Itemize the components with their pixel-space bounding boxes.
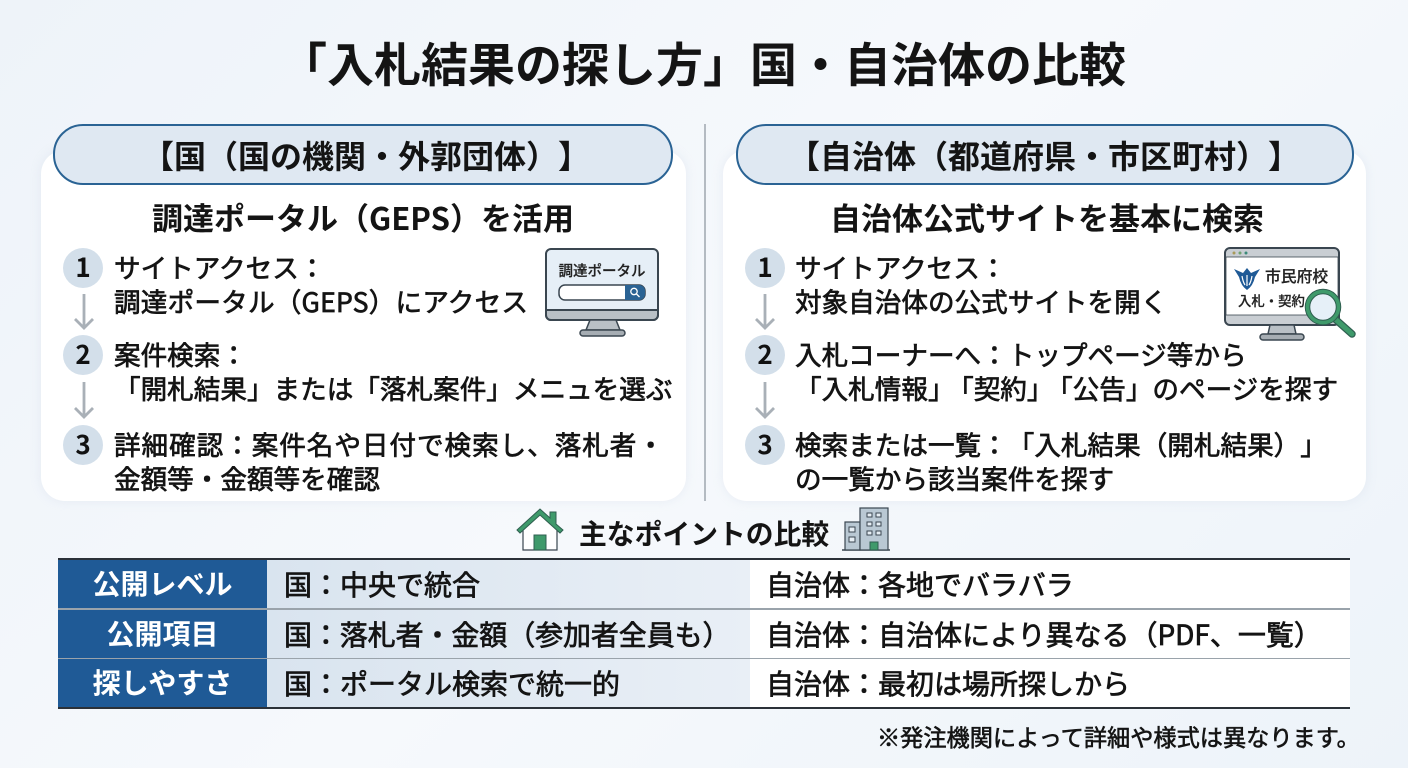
table top border [58, 558, 1350, 560]
step 1 number: 1 [75, 248, 91, 285]
step 2 number: 2 [757, 335, 773, 372]
step 3 text: の一覧から該当案件を探す [795, 458, 1114, 497]
icon: city website monitor with magnifier: 入札・契約 [1238, 290, 1305, 310]
arrow 1 to 2 [755, 294, 775, 330]
step 1 text: サイトアクセス： [114, 247, 325, 286]
title: 「入札結果の探し方」国・自治体の比較 [280, 27, 1126, 96]
row: ease of finding [58, 659, 1350, 707]
icon: house [516, 508, 564, 551]
icon: procurement portal monitor [545, 248, 659, 337]
arrow 2 to 3 [74, 382, 94, 419]
step 2 number [745, 335, 785, 375]
panel background [41, 150, 686, 501]
step 1 number [745, 248, 785, 288]
icon: procurement portal monitor: 調達ポータル [558, 260, 646, 281]
arrow 2 to 3 [755, 382, 775, 419]
comparison heading [516, 507, 890, 553]
panel heading: 【国（国の機関・外郭団体）】 [142, 132, 590, 178]
row: disclosure level [58, 560, 1350, 608]
row: ease of finding: 国：ポータル検索で統一的 [284, 663, 620, 703]
step 2 text [795, 334, 1338, 407]
icon: city website monitor with magnifier: 市民府校 [1265, 264, 1328, 287]
step 1 text: サイトアクセス： [795, 247, 1006, 286]
step 3 text: 検索または一覧：「入札結果（開札結果）」 [795, 424, 1327, 463]
step 2 number: 2 [75, 335, 91, 372]
table bottom border [58, 707, 1350, 709]
panel header pill [53, 124, 673, 185]
step 1 text [114, 247, 528, 320]
step 1 text: 対象自治体の公式サイトを開く [795, 281, 1167, 320]
step 3 number: 3 [757, 425, 773, 462]
panel background [723, 150, 1366, 501]
step 2 text: 案件検索： [114, 334, 247, 373]
row: disclosure level: 国：中央で統合 [284, 564, 480, 604]
panel header pill [736, 124, 1354, 185]
arrow 1 to 2 [74, 294, 94, 330]
step 2 number [63, 335, 103, 375]
panel: national [41, 124, 686, 501]
step 3 number: 3 [75, 425, 91, 462]
step 2 text: 入札コーナーへ：トップページ等から [795, 334, 1247, 373]
step 3 text: 金額等・金額等を確認 [114, 458, 380, 497]
step 3 text [114, 424, 665, 497]
step 1 number [63, 248, 103, 288]
central divider [704, 124, 706, 501]
emblem [1234, 268, 1260, 290]
row: ease of finding: 探しやすさ [93, 662, 232, 702]
step 2 text: 「開札結果」または「落札案件」メニュを選ぶ [114, 368, 672, 407]
table row divider [58, 608, 1350, 610]
row: disclosed items: 国：落札者・金額（参加者全員も） [284, 614, 730, 654]
footnote: ※発注機関によって詳細や様式は異なります。 [877, 719, 1360, 753]
icon: city website monitor with magnifier [1224, 247, 1356, 341]
table row divider [58, 658, 1350, 659]
step 2 text [114, 334, 672, 407]
icon: office buildings [842, 507, 890, 551]
row: ease of finding: 自治体：最初は場所探しから [766, 663, 1130, 703]
panel subheading: 自治体公式サイトを基本に検索 [830, 194, 1264, 239]
panel subheading: 調達ポータル（GEPS）を活用 [152, 194, 574, 239]
row: disclosure level: 公開レベル [92, 563, 232, 603]
row: disclosure level: 自治体：各地でバラバラ [766, 564, 1074, 604]
step 2 text: 「入札情報」「契約」「公告」のページを探す [795, 368, 1338, 407]
step 3 text [795, 424, 1327, 497]
step 1 text [795, 247, 1167, 320]
panel: local governments [723, 124, 1366, 501]
comparison table [58, 558, 1350, 709]
comparison heading text: 主なポイントの比較 [579, 513, 829, 553]
step 1 text: 調達ポータル（GEPS）にアクセス [114, 281, 528, 320]
step 1 number: 1 [757, 248, 773, 285]
panel heading: 【自治体（都道府県・市区町村）】 [788, 132, 1300, 178]
step 3 number [63, 425, 103, 465]
row: disclosed items: 公開項目 [106, 613, 218, 653]
step 3 text: 詳細確認：案件名や日付で検索し、落札者・ [114, 424, 665, 463]
row: disclosed items: 自治体：自治体により異なる（PDF、一覧） [766, 614, 1322, 654]
step 3 number [745, 425, 785, 465]
row: disclosed items [58, 610, 1350, 658]
